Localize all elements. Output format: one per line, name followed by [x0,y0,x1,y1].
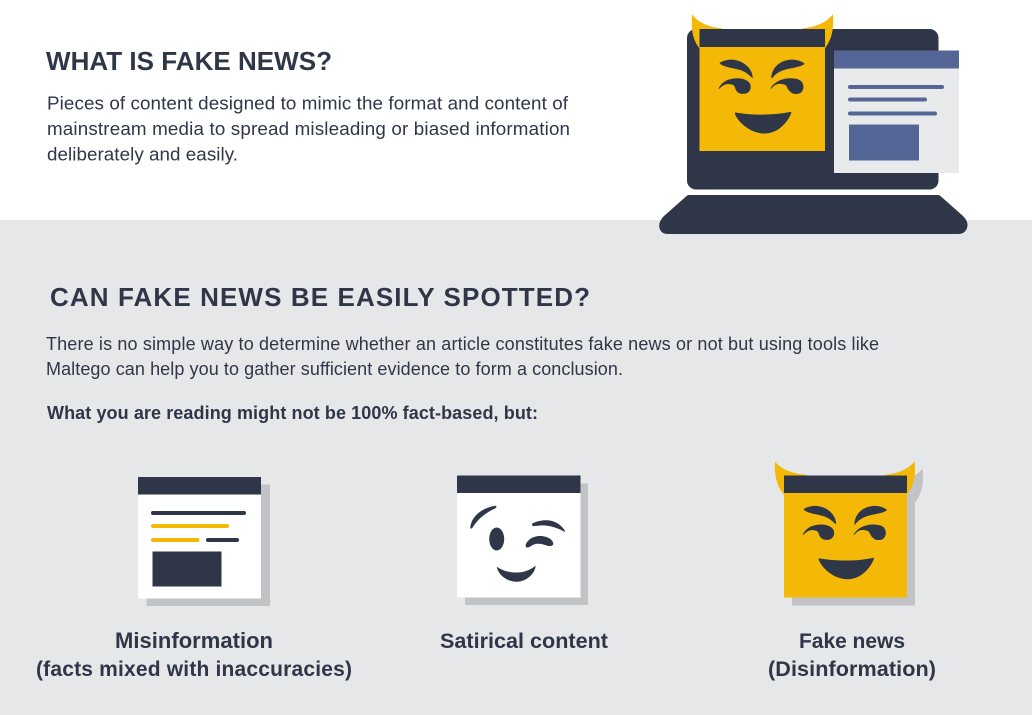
intro paragraph: deliberately and easily. [47,144,238,164]
intro paragraph: Pieces of content designed to mimic the format and content of [47,92,569,114]
illustration: laptop with devil face and browser window [659,14,968,234]
browser window [834,50,959,173]
icon: winking satire face [457,476,588,605]
intro paragraph: mainstream media to spread misleading or biased information [47,118,570,139]
label: misinformation: Misinformation [115,628,273,653]
laptop screen [687,29,938,190]
explanatory paragraph: There is no simple way to determine whether an article constitutes fake news or not but using tools like [46,334,879,354]
label: misinformation [36,628,352,681]
label: satirical content: Satirical content [440,628,608,653]
label: fake news [768,630,936,681]
explanatory paragraph [46,334,879,379]
label: fake news: (Disinformation) [768,656,936,681]
heading: can fake news be easily spotted: CAN FAKE NEWS BE EASILY SPOTTED? [50,282,590,312]
laptop base [659,195,968,234]
intro paragraph [47,92,570,164]
title: what is fake news: WHAT IS FAKE NEWS? [46,46,332,76]
grey lower background [0,220,1032,715]
bold lead-in sentence: What you are reading might not be 100% fact-based, but: [47,403,538,423]
label: fake news: Fake news [799,630,905,653]
devil sticky note [692,14,833,151]
icon: misinformation article [138,477,270,606]
label: misinformation: (facts mixed with inaccuracies) [36,658,352,681]
explanatory paragraph: Maltego can help you to gather sufficient evidence to form a conclusion. [46,359,623,379]
icon: fake news devil [775,462,923,606]
